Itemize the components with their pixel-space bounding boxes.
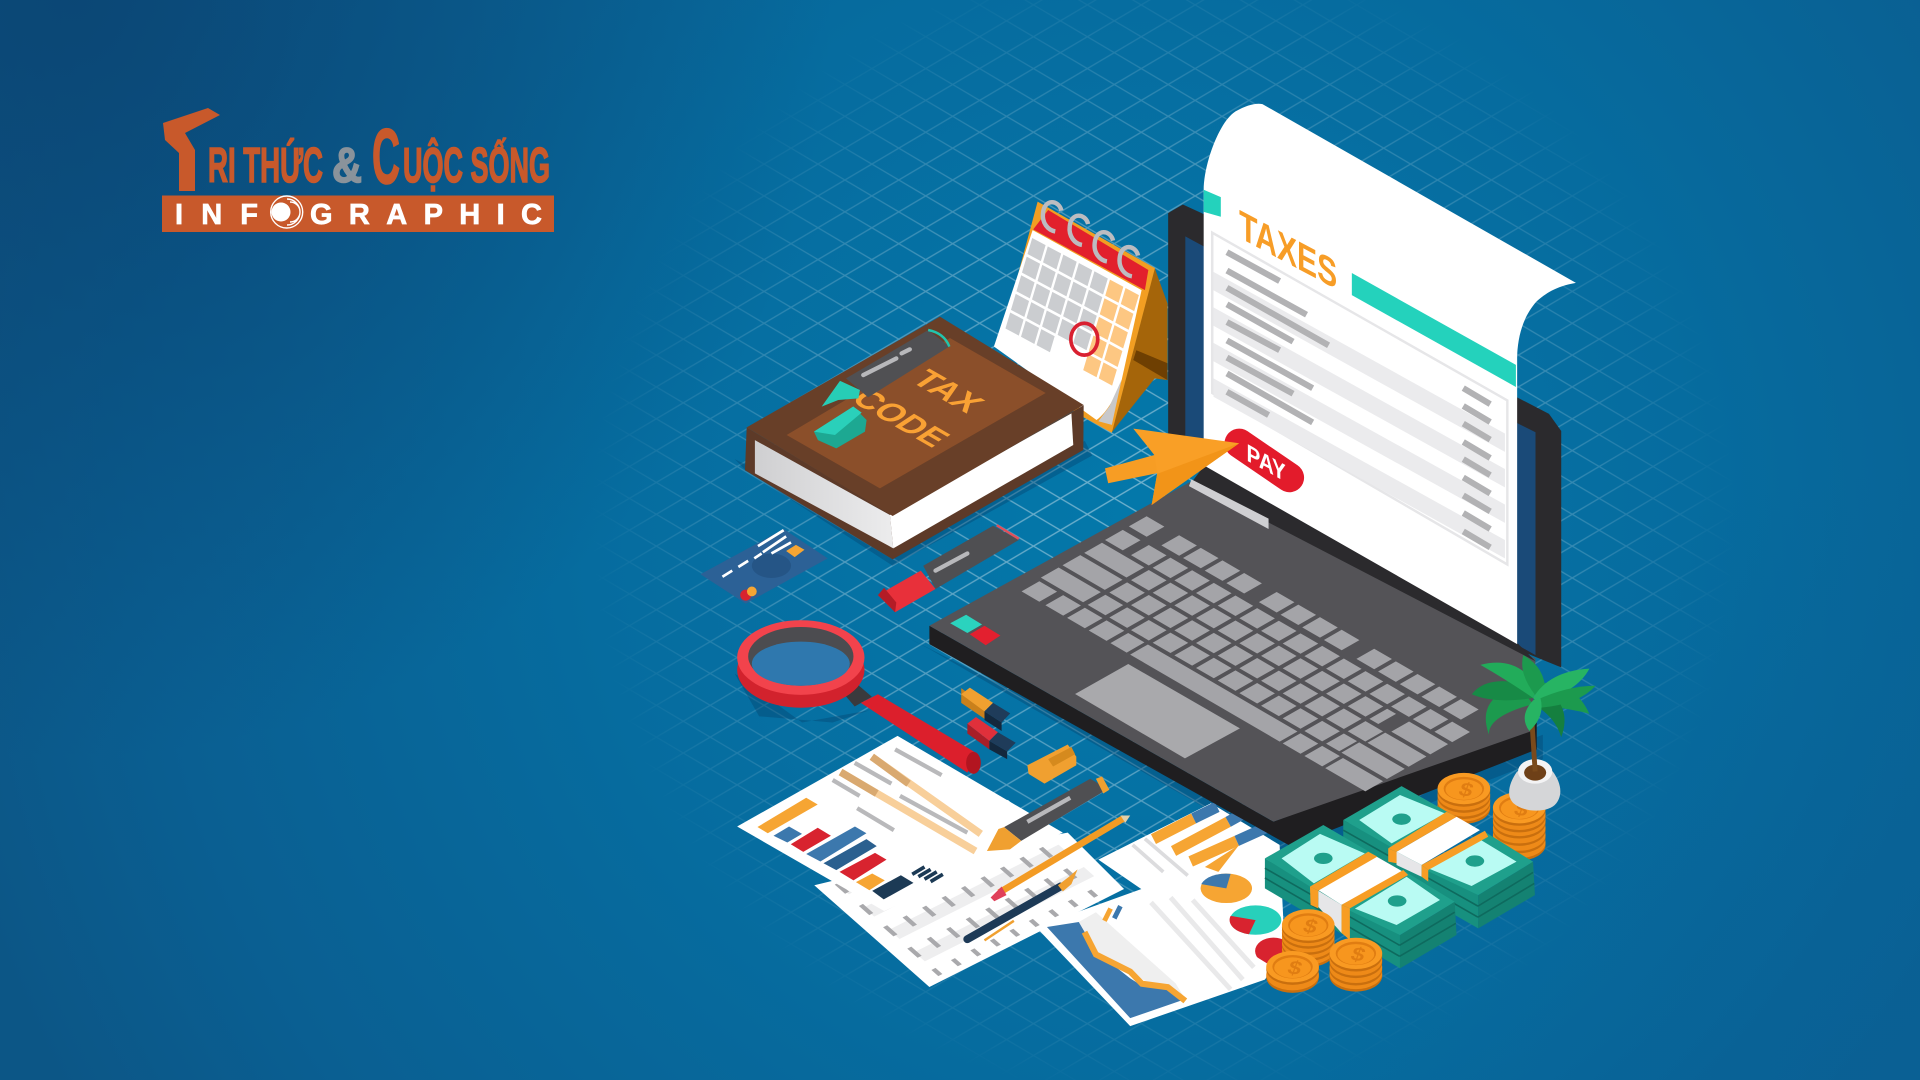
logo wordmark: &	[332, 139, 362, 193]
teal button	[950, 615, 982, 633]
orange highlighter	[987, 776, 1109, 851]
marked date	[1071, 323, 1098, 355]
logo wordmark: RI THỨC	[208, 138, 323, 193]
pie chart orange	[1201, 874, 1252, 903]
document: bar report	[737, 736, 1063, 911]
logo: Tri thức & Cuộc sống Infographic	[162, 108, 554, 232]
table row bands	[1213, 272, 1505, 558]
bill top	[1346, 872, 1455, 935]
logo wordmark: UỘC SỐNG	[403, 138, 550, 193]
logo banner: GRAPHIC	[310, 199, 542, 231]
credit card	[700, 529, 828, 604]
bill top	[1422, 831, 1533, 895]
paper band	[1388, 812, 1488, 882]
pie chart red	[1255, 938, 1292, 965]
magnifying glass	[737, 620, 981, 774]
red button	[970, 626, 1000, 645]
coin stacks behind money	[1438, 773, 1546, 861]
money bundle front	[1265, 825, 1457, 968]
teal highlighter	[822, 330, 949, 407]
handle	[840, 682, 981, 774]
calendar frame	[1003, 202, 1155, 433]
pen	[967, 869, 1078, 940]
page block right	[890, 413, 1073, 548]
top cover	[747, 317, 1084, 516]
document: pie report	[1098, 803, 1292, 967]
document: table sheet	[814, 798, 1124, 987]
laptop	[929, 204, 1561, 846]
orange cursor arrow	[1105, 429, 1239, 505]
calendar page	[994, 230, 1142, 420]
logo O emblem	[271, 196, 303, 228]
coin stack: $	[1511, 797, 1532, 821]
logo wordmark	[208, 112, 550, 200]
hinge strip	[1191, 467, 1536, 661]
laptop lid	[1168, 204, 1561, 667]
vent strip	[1189, 479, 1269, 529]
document: area chart	[1036, 888, 1273, 1026]
highlighted text lines	[833, 749, 981, 851]
logo banner	[162, 196, 554, 232]
pie chart teal	[1230, 905, 1281, 935]
trunk	[1532, 720, 1535, 771]
book title: TAX	[903, 365, 991, 418]
teal cap	[814, 407, 867, 448]
potted palm plant	[1472, 655, 1596, 811]
teal accent left	[1204, 190, 1221, 217]
coin stack: $	[1300, 914, 1321, 938]
orange marker cap	[1027, 744, 1076, 784]
logo banner: INF	[175, 199, 258, 231]
tax code book	[745, 317, 1084, 559]
logo wordmark: C	[372, 112, 400, 200]
calendar stand	[1112, 268, 1168, 432]
bar chart	[757, 798, 913, 899]
mini legend	[912, 867, 943, 882]
money bundle back	[1343, 786, 1535, 928]
book title	[843, 365, 991, 453]
keyboard	[1018, 521, 1485, 792]
teal accent right	[1352, 273, 1516, 387]
bill top	[1265, 825, 1376, 889]
book title: CODE	[843, 384, 957, 453]
calendar	[994, 202, 1168, 433]
coin stacks front	[1266, 909, 1382, 993]
orange and blue bars	[1153, 807, 1269, 861]
logo T mark	[163, 108, 220, 191]
stripes and ticks on sheet	[837, 798, 1110, 975]
coin stack: $	[1348, 943, 1369, 966]
heading TAXES: TAXES	[1239, 202, 1337, 299]
isometric grid floor	[620, 0, 1706, 1070]
lower cover	[745, 405, 1084, 559]
table outline	[1212, 233, 1507, 564]
leaves	[1472, 655, 1596, 737]
coin stack: $	[1285, 956, 1305, 979]
page curl shade	[1098, 380, 1122, 425]
paper band	[1310, 852, 1408, 940]
ground shadows	[735, 441, 1543, 857]
PAY button: PAY	[1247, 438, 1286, 488]
red marker	[878, 525, 1019, 612]
wide keys	[1084, 543, 1144, 578]
row labels	[1227, 252, 1329, 422]
trackpad	[1075, 664, 1240, 758]
text lines	[1084, 898, 1254, 989]
page block left	[755, 440, 893, 548]
pot	[1509, 759, 1560, 811]
calendar rings	[1043, 202, 1138, 276]
laptop base side	[929, 626, 1537, 846]
coin stack: $	[1456, 778, 1477, 801]
pencil	[991, 816, 1130, 901]
calendar cells	[1008, 246, 1139, 379]
calendar header	[1033, 210, 1148, 290]
area chart	[1047, 922, 1185, 1018]
laptop base top	[929, 481, 1536, 822]
bill top	[1343, 786, 1456, 847]
tax document page	[1204, 104, 1576, 644]
erasers	[961, 688, 1016, 759]
row values	[1463, 388, 1490, 547]
